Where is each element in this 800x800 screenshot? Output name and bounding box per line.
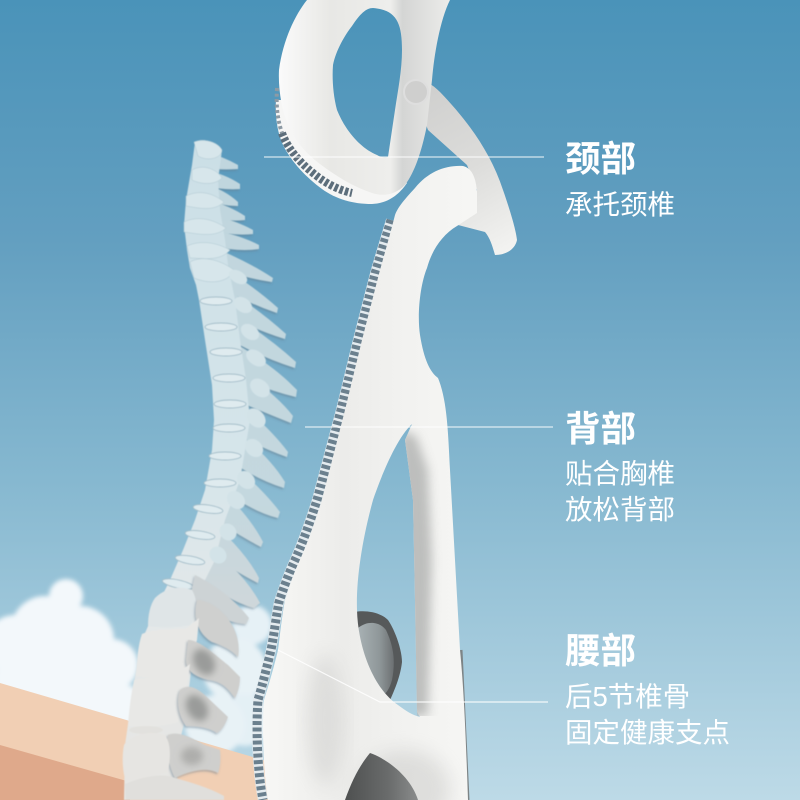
description: lumbar <box>565 681 730 748</box>
chair: right rim <box>461 650 468 800</box>
heading: back: 背部 <box>565 409 636 449</box>
chair: headrest rim <box>276 100 407 204</box>
spine column <box>124 140 250 800</box>
chair: headrest mesh strip <box>277 88 352 193</box>
callout line: back <box>305 426 553 428</box>
label: back <box>565 409 675 525</box>
description: back: 贴合胸椎 <box>565 458 675 489</box>
lumbar vertebra E <box>123 733 224 800</box>
description: lumbar: 固定健康支点 <box>565 717 730 748</box>
callout line: lumbar <box>278 650 548 702</box>
description: back: 放松背部 <box>565 494 675 525</box>
chair: back mesh strip <box>257 220 391 800</box>
label: lumbar <box>565 631 730 748</box>
lumbar vertebra D <box>129 687 228 734</box>
lumbar vertebra C <box>128 640 240 727</box>
chair: lumbar pad <box>350 611 402 705</box>
intervertebral discs <box>162 297 246 591</box>
description: neck: 承托颈椎 <box>565 189 675 220</box>
sandy wall: shaded lower face <box>0 745 130 800</box>
description: back <box>565 458 675 525</box>
description: lumbar: 后5节椎骨 <box>565 681 690 712</box>
label: neck <box>565 139 675 220</box>
lumbar vertebra B <box>136 600 239 679</box>
sandy wall: upper face <box>0 683 280 800</box>
chair: headrest pivot <box>404 80 428 104</box>
heading: neck: 颈部 <box>565 139 636 179</box>
chair: headrest <box>279 0 450 195</box>
spine model <box>123 140 297 800</box>
chair: lower opening <box>345 753 418 800</box>
vertebra processes <box>202 152 297 608</box>
cervical vertebra blobs <box>184 140 234 282</box>
chair: main back frame <box>263 166 477 800</box>
clouds <box>0 579 272 755</box>
chair: headrest arm <box>416 80 517 255</box>
heading: lumbar: 腰部 <box>565 631 636 671</box>
process joints <box>206 267 274 567</box>
callout line: neck <box>264 156 544 158</box>
lumbar vertebra A <box>148 575 249 627</box>
